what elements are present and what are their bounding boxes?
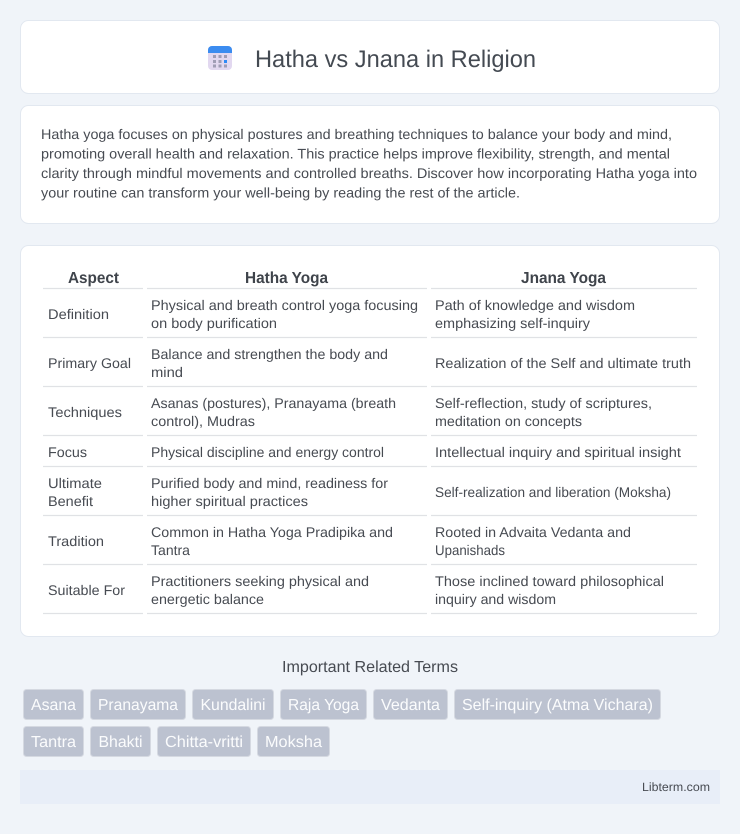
- row: suitable for: Practitioners seeking physical and: [151, 573, 369, 589]
- row: techniques: control), Mudras: [151, 413, 255, 429]
- row: ultimate benefit: Ultimate: [48, 475, 102, 491]
- row: definition: on body purification: [151, 315, 277, 331]
- panel: comparison table: [20, 246, 720, 636]
- tag: Vedanta: [374, 690, 448, 720]
- icon: calendar: [208, 46, 232, 70]
- tag: Tantra: Tantra: [31, 734, 76, 751]
- title: Hatha vs Jnana in Religion: [255, 46, 536, 73]
- tag: Bhakti: [90, 726, 150, 756]
- tag: Tantra: [24, 726, 84, 756]
- row: definition: Path of knowledge and wisdom: [435, 297, 635, 313]
- row: techniques: Asanas (postures), Pranayama (breath: [151, 395, 396, 411]
- tag: Vedanta: Vedanta: [381, 697, 440, 714]
- row: ultimate benefit: Self-realization and liberation (Moksha): [435, 484, 671, 500]
- intro text: clarity through mindful movements and controlled breaths. Discover how incorporating Hatha yoga into: [41, 165, 697, 181]
- panel: introduction: [20, 106, 720, 224]
- tag: Raja Yoga: [280, 690, 366, 720]
- intro text: your routine can transform your well-being by reading the rest of the article.: [41, 184, 520, 200]
- tag: Self-inquiry: Self-inquiry (Atma Vichara): [462, 697, 653, 714]
- tag: Pranayama: [90, 690, 186, 720]
- row: tradition: Rooted in Advaita Vedanta and: [435, 524, 631, 540]
- tag: Self-inquiry: [454, 690, 660, 720]
- intro text: promoting overall health and relaxation. This practice helps improve flexibility, strength, and mental: [41, 146, 670, 162]
- row: suitable for: inquiry and wisdom: [435, 591, 556, 607]
- row: ultimate benefit: Benefit: [48, 493, 93, 509]
- row: definition: [48, 297, 635, 331]
- tag: Bhakti: Bhakti: [98, 734, 142, 751]
- tag: Moksha: [258, 726, 330, 756]
- row: suitable for: energetic balance: [151, 591, 264, 607]
- row: tradition: Tantra: [151, 542, 190, 558]
- table header: Jnana Yoga: [521, 270, 606, 287]
- row: techniques: meditation on concepts: [435, 413, 582, 429]
- row: focus: Focus: [48, 444, 87, 460]
- row: focus: Physical discipline and energy control: [151, 444, 384, 460]
- tag: Chitta-vritti: [158, 726, 250, 756]
- table header: Hatha Yoga: [245, 270, 328, 287]
- row: techniques: Self-reflection, study of scriptures,: [435, 395, 652, 411]
- tag: Asana: Asana: [31, 697, 76, 714]
- table header: Aspect: [68, 270, 120, 287]
- tag: Kundalini: Kundalini: [200, 697, 266, 714]
- row: tradition: [48, 524, 631, 558]
- row: focus: Intellectual inquiry and spiritual insight: [435, 444, 681, 460]
- row: primary goal: mind: [151, 364, 183, 380]
- row: definition: Definition: [48, 306, 109, 322]
- row: primary goal: Balance and strengthen the body and: [151, 346, 388, 362]
- row: ultimate benefit: higher spiritual practices: [151, 493, 308, 509]
- row: tradition: Common in Hatha Yoga Pradipika and: [151, 524, 393, 540]
- related term tags: [24, 690, 660, 756]
- row: techniques: Techniques: [48, 404, 122, 420]
- row: tradition: Upanishads: [435, 542, 505, 558]
- row: techniques: [48, 395, 652, 429]
- row: definition: emphasizing self-inquiry: [435, 315, 590, 331]
- row: primary goal: Primary Goal: [48, 355, 131, 371]
- table header: [68, 270, 606, 287]
- row: suitable for: Suitable For: [48, 582, 125, 598]
- tag: Asana: [24, 690, 84, 720]
- tag: Raja Yoga: Raja Yoga: [288, 697, 359, 714]
- tag: Kundalini: [192, 690, 274, 720]
- row: focus: [48, 444, 681, 460]
- row: ultimate benefit: Purified body and mind, readiness for: [151, 475, 388, 491]
- intro text: Hatha yoga focuses on physical postures and breathing techniques to balance your body and mind,: [41, 126, 672, 142]
- header panel: [20, 20, 720, 94]
- footer: [20, 770, 720, 804]
- tag: Chitta-vritti: Chitta-vritti: [165, 734, 243, 751]
- row: suitable for: [48, 573, 664, 607]
- tag: Moksha: Moksha: [265, 734, 322, 751]
- row: ultimate benefit: [48, 475, 671, 509]
- row: tradition: Tradition: [48, 533, 104, 549]
- tag: Pranayama: Pranayama: [98, 697, 178, 714]
- row: primary goal: [48, 346, 691, 380]
- intro text: [41, 126, 697, 200]
- row: suitable for: Those inclined toward philosophical: [435, 573, 664, 589]
- heading: important related terms: Important Related Terms: [282, 659, 458, 676]
- footer: Libterm.com: [642, 780, 710, 794]
- row: definition: Physical and breath control yoga focusing: [151, 297, 418, 313]
- row: primary goal: Realization of the Self and ultimate truth: [435, 355, 691, 371]
